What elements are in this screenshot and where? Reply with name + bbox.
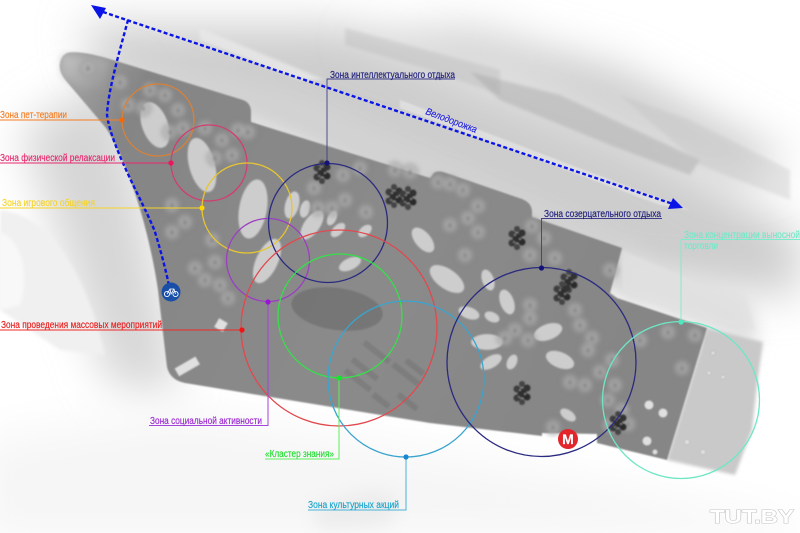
circle: mass events: [241, 230, 437, 426]
dark oval lawn: [289, 282, 385, 336]
callout: social activity: [149, 299, 271, 427]
circle: knowledge cluster: [278, 254, 402, 378]
callout: mass events: [0, 320, 245, 333]
arrow: route end: [668, 198, 683, 209]
icon: metro: М: [562, 431, 574, 447]
callout: intellectual rest: Зона интеллектуального отдыха: [330, 70, 455, 81]
circle: pet therapy: [122, 84, 194, 156]
callout: pet therapy: [0, 110, 125, 123]
icon: metro: [558, 429, 578, 449]
callout: contemplative rest: [539, 209, 662, 271]
trees: [77, 57, 706, 438]
callout: knowledge cluster: [265, 375, 342, 460]
circle: play: [202, 163, 292, 253]
circle: contemplative: [447, 268, 636, 456]
callout: physical relaxation: Зона физической релаксации: [0, 152, 115, 164]
circle: street trade: [602, 322, 760, 478]
callout: physical relaxation: [0, 152, 174, 166]
cycle route: [103, 12, 673, 286]
panel: right lighter plaza section: [667, 328, 763, 475]
callout: cultural actions: [308, 454, 409, 511]
seating rows: [343, 340, 425, 412]
callout: pet therapy: Зона пет-терапии: [0, 110, 67, 121]
upper right buildings: [345, 28, 500, 95]
panel: plaza surface: [60, 52, 707, 460]
arrow: route start: [91, 5, 106, 19]
callout: cultural actions: Зона культурных акций: [308, 500, 399, 511]
left roundabout texture: [0, 210, 105, 355]
circle: social: [226, 218, 310, 302]
callout: contemplative rest: Зона созерцательного отдыха: [544, 209, 661, 220]
zone circles: [122, 84, 760, 478]
watermark: TUT.BY: [710, 507, 794, 527]
callout: social activity: Зона социальной активности: [150, 416, 262, 427]
dark conifer clusters: [314, 160, 626, 435]
label: cycle path: Велодорожка: [424, 107, 479, 136]
callout: mass events: Зона проведения массовых мероприятий: [1, 320, 162, 331]
callout: intellectual rest: [324, 70, 455, 166]
callout: play: [0, 197, 205, 211]
callout: play: Зона игрового общения: [2, 197, 95, 209]
circle: cultural: [328, 301, 484, 457]
callout: knowledge cluster: «Кластер знания»: [265, 449, 334, 460]
plaza tip highlight: [62, 55, 110, 90]
lawns: pale ellipses: [135, 98, 578, 424]
callout: street trade: торговли: [684, 241, 718, 252]
circle: physical relaxation: [171, 125, 247, 201]
small kiosks: [175, 318, 725, 454]
callout: street trade: [678, 230, 800, 325]
circle: intellectual: [268, 164, 388, 282]
icon: bicycle sign: [162, 282, 180, 302]
